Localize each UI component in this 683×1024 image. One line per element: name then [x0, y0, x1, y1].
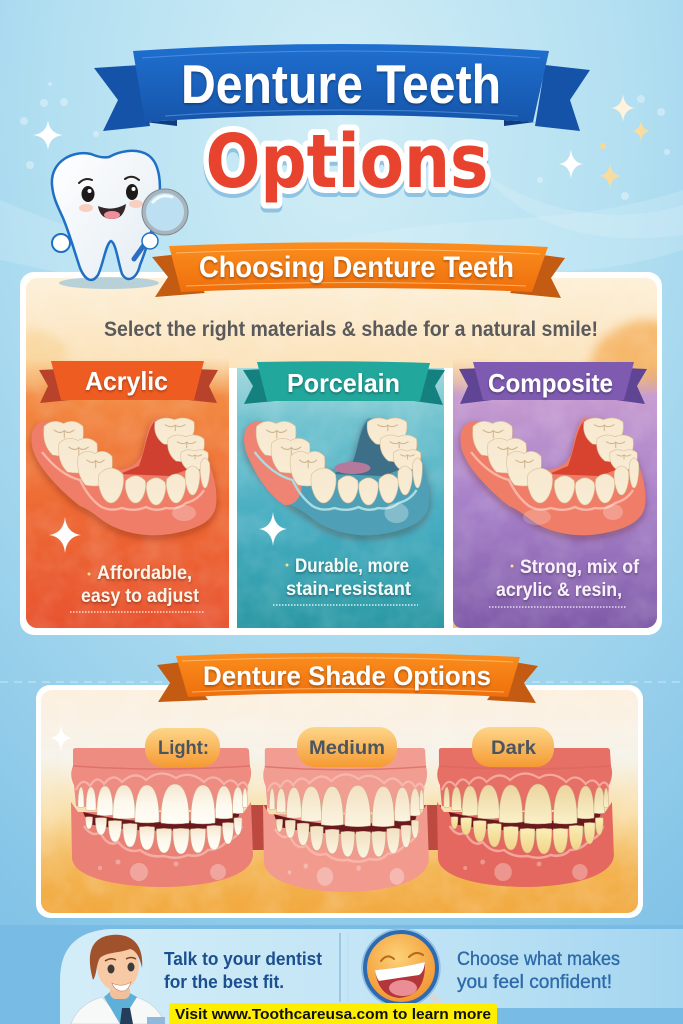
heading: Denture Teeth: Denture Teeth: [181, 53, 501, 115]
title banner: Denture Teeth: [94, 44, 590, 131]
card: composite background: [453, 358, 657, 628]
denture: medium shade: [263, 748, 429, 892]
text: acrylic description: easy to adjust: [81, 586, 200, 607]
denture: dark shade: [437, 748, 614, 887]
text: choose what makes you feel confident: Choose what makes: [457, 949, 620, 970]
call to action: website strip: Visit www.Toothcareusa.com to learn more: [175, 1006, 491, 1023]
illustration: acrylic partial denture: [32, 418, 216, 535]
sparkles: header: [33, 94, 650, 189]
ribbon: acrylic: [39, 361, 218, 403]
card: porcelain: [243, 361, 445, 605]
label: light: Light:: [158, 738, 209, 759]
card: acrylic background: [26, 358, 229, 628]
icon: sparkle: [49, 517, 81, 553]
label: medium: [297, 727, 397, 767]
panel: choosing denture teeth: [0, 272, 683, 635]
text: composite description: [489, 557, 640, 607]
ribbon: composite: [459, 362, 647, 404]
ribbon: composite: Composite: [488, 368, 613, 398]
text: composite description: Strong, mix of: [520, 557, 640, 578]
icon: smiling face in magnifier: [362, 929, 448, 1012]
footer band: [60, 929, 683, 1024]
label: dark: Dark: [491, 738, 536, 759]
heading: choosing denture teeth: Choosing Denture Teeth: [199, 251, 514, 284]
ribbon: porcelain: [243, 361, 445, 405]
ribbon: acrylic: Acrylic: [85, 366, 168, 396]
heading: Options: Options: [206, 119, 488, 205]
text: talk to your dentist: for the best fit.: [164, 972, 284, 992]
banner: choosing denture teeth: [152, 242, 565, 298]
icon: sparkle: [259, 512, 287, 546]
heading: Options: Options: [206, 123, 488, 209]
subtitle: Select the right materials & shade for a natural smile!: [104, 318, 598, 341]
heading: denture shade options: Denture Shade Options: [203, 661, 491, 691]
illustration: dentist: [71, 935, 165, 1024]
text: porcelain description: stain-resistant: [286, 579, 412, 600]
text: composite description: acrylic & resin,: [496, 580, 622, 601]
card: porcelain background: [237, 368, 444, 628]
illustration: porcelain partial denture: [244, 418, 429, 535]
panel: denture shade options: [36, 685, 643, 918]
text: porcelain description: Durable, more: [295, 556, 409, 577]
text: acrylic description: Affordable,: [97, 563, 192, 584]
heading: Options: Options: [206, 119, 488, 205]
text: talk to your dentist: Talk to your dentist: [164, 949, 322, 969]
card: acrylic: [32, 361, 218, 612]
ribbon: porcelain: Porcelain: [287, 368, 400, 398]
text: talk to your dentist: [164, 949, 322, 992]
text: acrylic description: [70, 563, 205, 612]
text: porcelain description: [273, 556, 418, 605]
mascot: tooth with magnifying glass: [52, 151, 188, 289]
label: medium: Medium: [309, 738, 385, 759]
denture: light shade: [71, 748, 253, 887]
label: light: [145, 728, 220, 767]
label: dark: [472, 727, 554, 767]
card: composite: [459, 362, 647, 607]
illustration: composite partial denture: [460, 418, 645, 535]
text: choose what makes you feel confident: you feel confident!: [457, 972, 612, 993]
banner: denture shade options: [157, 653, 538, 703]
text: choose what makes you feel confident: [457, 949, 620, 993]
icon: sparkle: [50, 725, 72, 751]
